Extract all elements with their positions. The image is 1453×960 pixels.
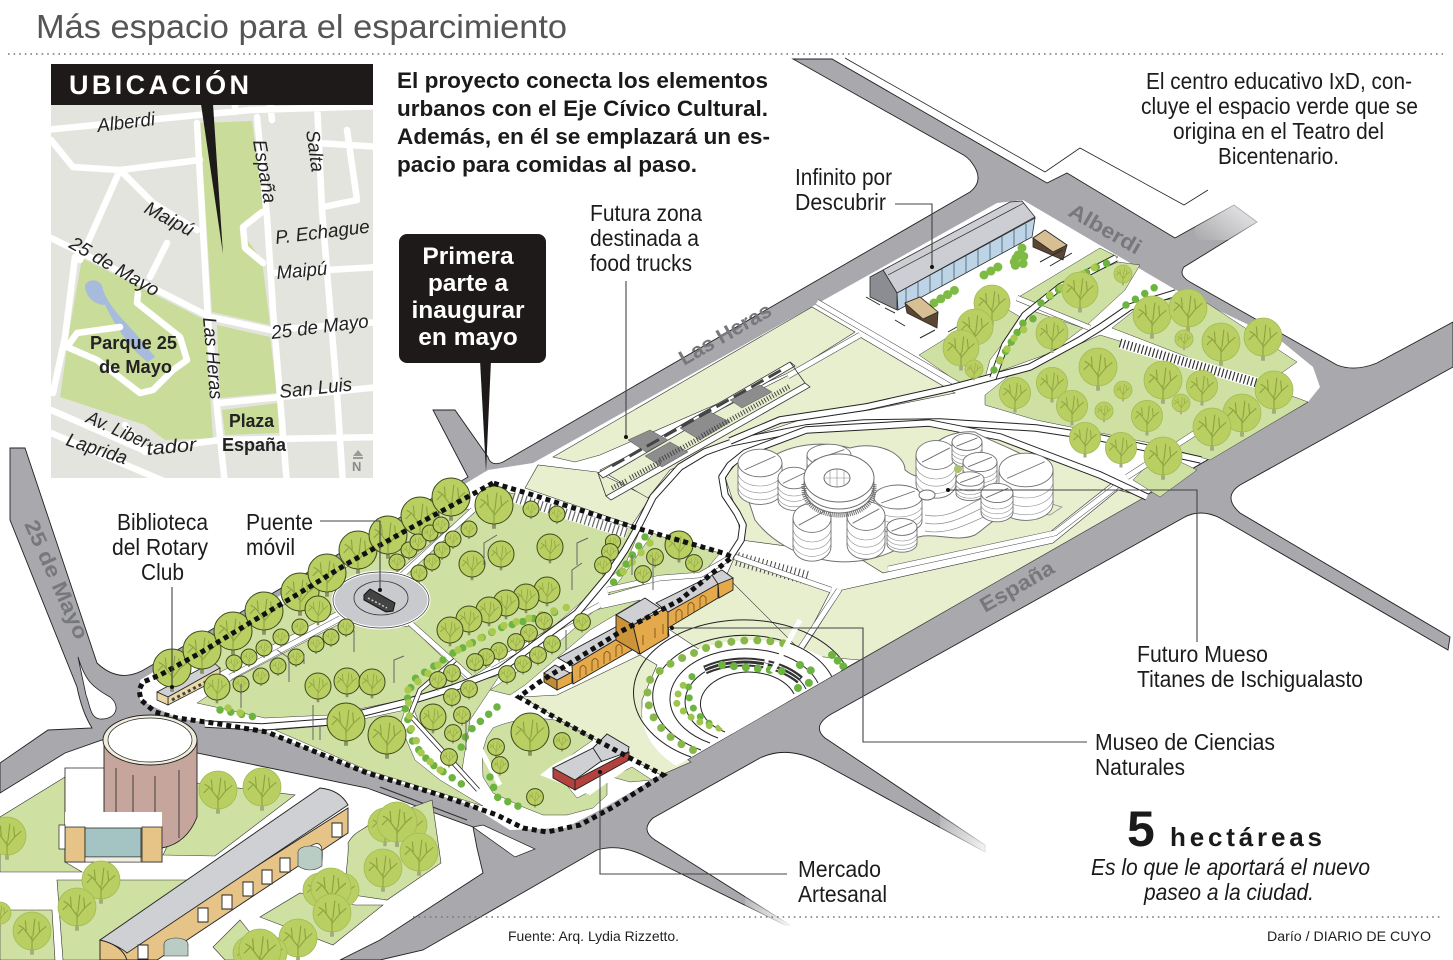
label: Infinito por Descubrir <box>795 164 934 269</box>
icon: north arrow: N <box>352 459 361 474</box>
label: Mercado Artesanal: Artesanal <box>798 881 887 907</box>
educational centre text: Bicentenario. <box>1218 143 1339 169</box>
road label: España: España <box>976 556 1059 617</box>
mid-green park lawns <box>197 248 1308 815</box>
map labels: Alberdi <box>95 109 157 137</box>
location map panel: España <box>248 138 280 205</box>
location map panel <box>45 64 380 485</box>
intro text: pacio para comidas al paso. <box>397 152 697 177</box>
footer: Fuente: Arq. Lydia Rizzetto. <box>508 928 679 944</box>
educational centre text: origina en el Teatro del <box>1173 118 1384 144</box>
map header <box>51 64 373 105</box>
location map panel: UBICACIÓN <box>69 69 249 100</box>
shrubs <box>220 248 1162 810</box>
label: Biblioteca <box>112 509 208 689</box>
label: Futuro Museo <box>946 488 1363 692</box>
food truck zone <box>598 362 810 500</box>
label: Biblioteca: Club <box>141 559 184 585</box>
location map panel: tador <box>146 435 198 460</box>
location map panel: 25 de Mayo <box>65 233 163 301</box>
footer <box>413 917 1443 944</box>
location map panel: España <box>222 435 287 455</box>
vaulted building <box>100 808 348 960</box>
map pointer <box>201 104 223 254</box>
label: Museo de Ciencias Naturales <box>670 626 1275 780</box>
road label: Alberdi: Alberdi <box>1064 199 1145 259</box>
light lawns <box>522 307 1145 775</box>
building: Mercado Artesanal <box>540 734 640 795</box>
intro text: urbanos con el Eje Cívico Cultural. <box>397 96 768 121</box>
stat: 5 hectáreas: hectáreas <box>1170 822 1322 852</box>
park site <box>140 200 1320 830</box>
museum: Futuro Museo Titanes de Ischigualasto <box>738 432 1062 562</box>
road label: Las Heras: Las Heras <box>675 299 776 370</box>
label: Mercado Artesanal: Mercado <box>798 856 881 882</box>
educational centre text <box>1141 68 1418 169</box>
location map panel: Plaza <box>229 411 275 431</box>
label: Infinito por Descubrir: Infinito por <box>795 164 892 190</box>
label: Futuro Museo: Titanes de Ischigualasto <box>1137 666 1363 692</box>
building: Biblioteca del Rotary Club <box>157 662 220 705</box>
callout: primera parte: parte a <box>428 270 509 297</box>
intro text: El proyecto conecta los elementos <box>397 68 768 93</box>
icon: north arrow <box>352 450 363 474</box>
paths and roads <box>230 298 1195 677</box>
building: Infinito por Descubrir <box>866 201 1072 338</box>
label: Futura zona: destinada a <box>590 225 699 251</box>
icon: Puente móvil plaza <box>333 572 429 628</box>
trees inside the park <box>153 265 1293 808</box>
location map panel: de Mayo <box>99 357 172 377</box>
callout: primera parte: Primera <box>422 243 514 270</box>
footer: Darío / DIARIO DE CUYO <box>1267 928 1431 944</box>
location map panel: P. Echague <box>274 217 371 249</box>
title: Más espacio para el esparcimiento <box>36 8 567 45</box>
drum building <box>65 768 162 862</box>
stat: 5 hectáreas: Es lo que le aportará el nuevo <box>1091 854 1370 880</box>
dotted boundary of first stage <box>139 483 732 832</box>
lake <box>85 280 155 362</box>
location map panel: Salta <box>301 129 328 173</box>
label: Infinito por Descubrir: Descubrir <box>795 189 886 215</box>
label: Puente móvil: móvil <box>246 534 295 560</box>
stat: 5 hectáreas: 5 <box>1127 801 1155 857</box>
label: Puente móvil: Puente <box>246 509 313 535</box>
stat: 5 hectáreas <box>1091 801 1370 905</box>
theatre district, bottom left <box>0 715 441 960</box>
building: Museo de Ciencias Naturales <box>543 570 733 690</box>
road label: 25 de Mayo: 25 de Mayo <box>19 517 93 643</box>
lamp posts <box>241 535 653 750</box>
label: Mercado Artesanal <box>598 770 887 907</box>
callout: primera parte <box>399 234 546 472</box>
intro text: Además, en él se emplazará un es- <box>397 124 770 149</box>
callout: primera parte: inaugurar <box>412 297 525 324</box>
callout: primera parte: en mayo <box>418 324 518 351</box>
label: Museo de Ciencias Naturales: Museo de Ciencias <box>1095 729 1275 755</box>
roundabout island <box>78 657 116 719</box>
intro text <box>397 68 770 177</box>
educational centre text: cluye el espacio verde que se <box>1141 93 1418 119</box>
label: Futura zona: Futura zona <box>590 200 702 226</box>
label: Biblioteca: Biblioteca <box>117 509 208 535</box>
label: Biblioteca: del Rotary <box>112 534 208 560</box>
location map panel: Las Heras <box>198 317 226 401</box>
amphitheatre <box>633 619 848 766</box>
label: Puente móvil <box>246 509 382 592</box>
educational centre text: El centro educativo IxD, con- <box>1146 68 1412 94</box>
label: Futura zona: food trucks <box>590 250 692 276</box>
stat: 5 hectáreas: paseo a la ciudad. <box>1143 879 1314 905</box>
label: Futura zona <box>590 200 702 439</box>
location map panel: Maipú <box>141 198 198 242</box>
location map panel: San Luis <box>278 374 354 403</box>
trees <box>199 771 237 814</box>
label: Museo de Ciencias Naturales: Naturales <box>1095 754 1185 780</box>
location map panel: Maipú <box>276 259 329 284</box>
location map panel: Laprida <box>63 430 130 469</box>
label: Futuro Museo: Futuro Mueso <box>1137 641 1268 667</box>
location map panel: Av. Liber <box>82 407 152 454</box>
location map panel: 25 de Mayo <box>269 311 370 344</box>
lawns <box>0 777 441 960</box>
location map panel: Parque 25 <box>90 333 177 353</box>
